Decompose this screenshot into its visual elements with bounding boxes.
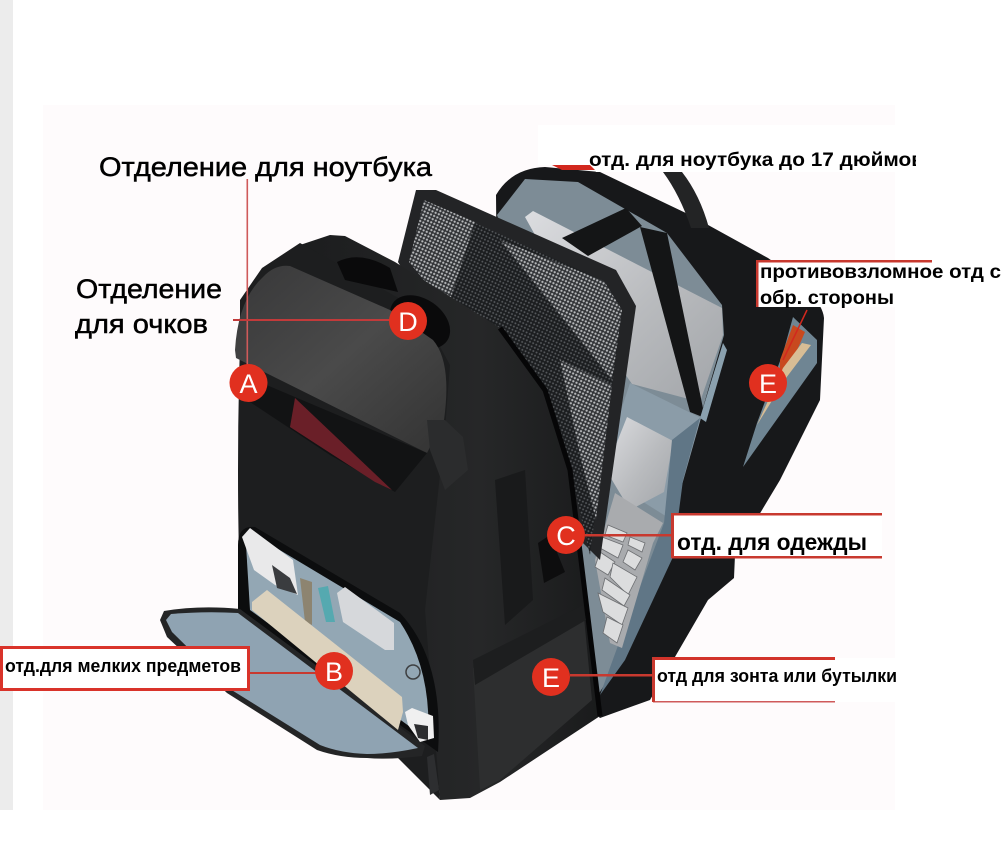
mesh divider frame (398, 190, 636, 560)
mesh divider (409, 200, 622, 555)
label: laptop up to 17 inches: отд. для ноутбука до 17 дюймов (589, 150, 924, 171)
marker E upper: E (759, 369, 777, 399)
rear body and back panel (496, 167, 824, 718)
label: glasses compartment with leader line (75, 274, 393, 339)
label: anti-theft back compartment: противовзломное отд с (760, 262, 1001, 283)
pens (300, 578, 312, 625)
front body face (238, 243, 450, 800)
label: small items compartment: отд.для мелких предметов (5, 656, 241, 676)
title: laptop compartment with leader line: Отделение для ноутбука (99, 152, 433, 182)
label: clothes compartment: отд. для одежды (677, 529, 867, 555)
white mask behind anti-theft label (757, 261, 1004, 307)
side corner panel (427, 420, 468, 490)
label: clothes compartment (585, 513, 882, 558)
car remote (405, 708, 434, 742)
USB port (538, 535, 565, 583)
label: small items compartment (2, 648, 318, 690)
front body side panel (300, 235, 600, 800)
label: anti-theft back compartment: обр. стороны (760, 288, 894, 309)
marker D: D (398, 307, 418, 337)
marker E upper (749, 364, 787, 402)
lower side pocket (473, 607, 592, 790)
zipper pull (427, 754, 439, 795)
blue lining strip (600, 418, 700, 695)
white mask behind top label (538, 125, 915, 172)
organizer pocket opening (238, 527, 439, 752)
passport (290, 398, 392, 490)
marker C (547, 516, 585, 554)
right rear pocket (743, 317, 817, 467)
open flap (160, 607, 425, 759)
marker E lower (532, 658, 570, 696)
marker A (230, 364, 268, 402)
marker A: A (239, 369, 258, 399)
marker D (389, 302, 427, 340)
power bank (337, 587, 394, 650)
rear compartment lining (497, 179, 724, 695)
label: anti-theft back compartment (756, 260, 1001, 360)
marker B (315, 652, 353, 690)
label: umbrella or bottle compartment: отд для зонта или бутылки (657, 666, 897, 686)
inner strap two (640, 227, 705, 418)
second laptop (606, 417, 673, 510)
laptop in rear compartment (525, 211, 723, 402)
upper front pocket (235, 266, 446, 453)
keys (406, 665, 420, 679)
top handle (663, 172, 709, 228)
keyboard (595, 493, 663, 648)
marker B: B (325, 657, 343, 687)
marker E lower: E (542, 663, 560, 693)
label: umbrella or bottle compartment (570, 657, 897, 702)
marker C: C (556, 521, 576, 551)
passport pocket opening (250, 378, 427, 492)
label: glasses compartment with leader line: Отделение (76, 274, 222, 304)
sunglasses (337, 257, 460, 360)
side webbing (495, 470, 533, 625)
inner strap one (562, 208, 642, 256)
folder sleeve (608, 383, 701, 520)
label: glasses compartment with leader line: для очков (75, 309, 208, 339)
illustration: open backpack (160, 167, 824, 800)
phone (242, 528, 298, 595)
notebook (252, 590, 403, 730)
side panel seam (500, 328, 600, 716)
